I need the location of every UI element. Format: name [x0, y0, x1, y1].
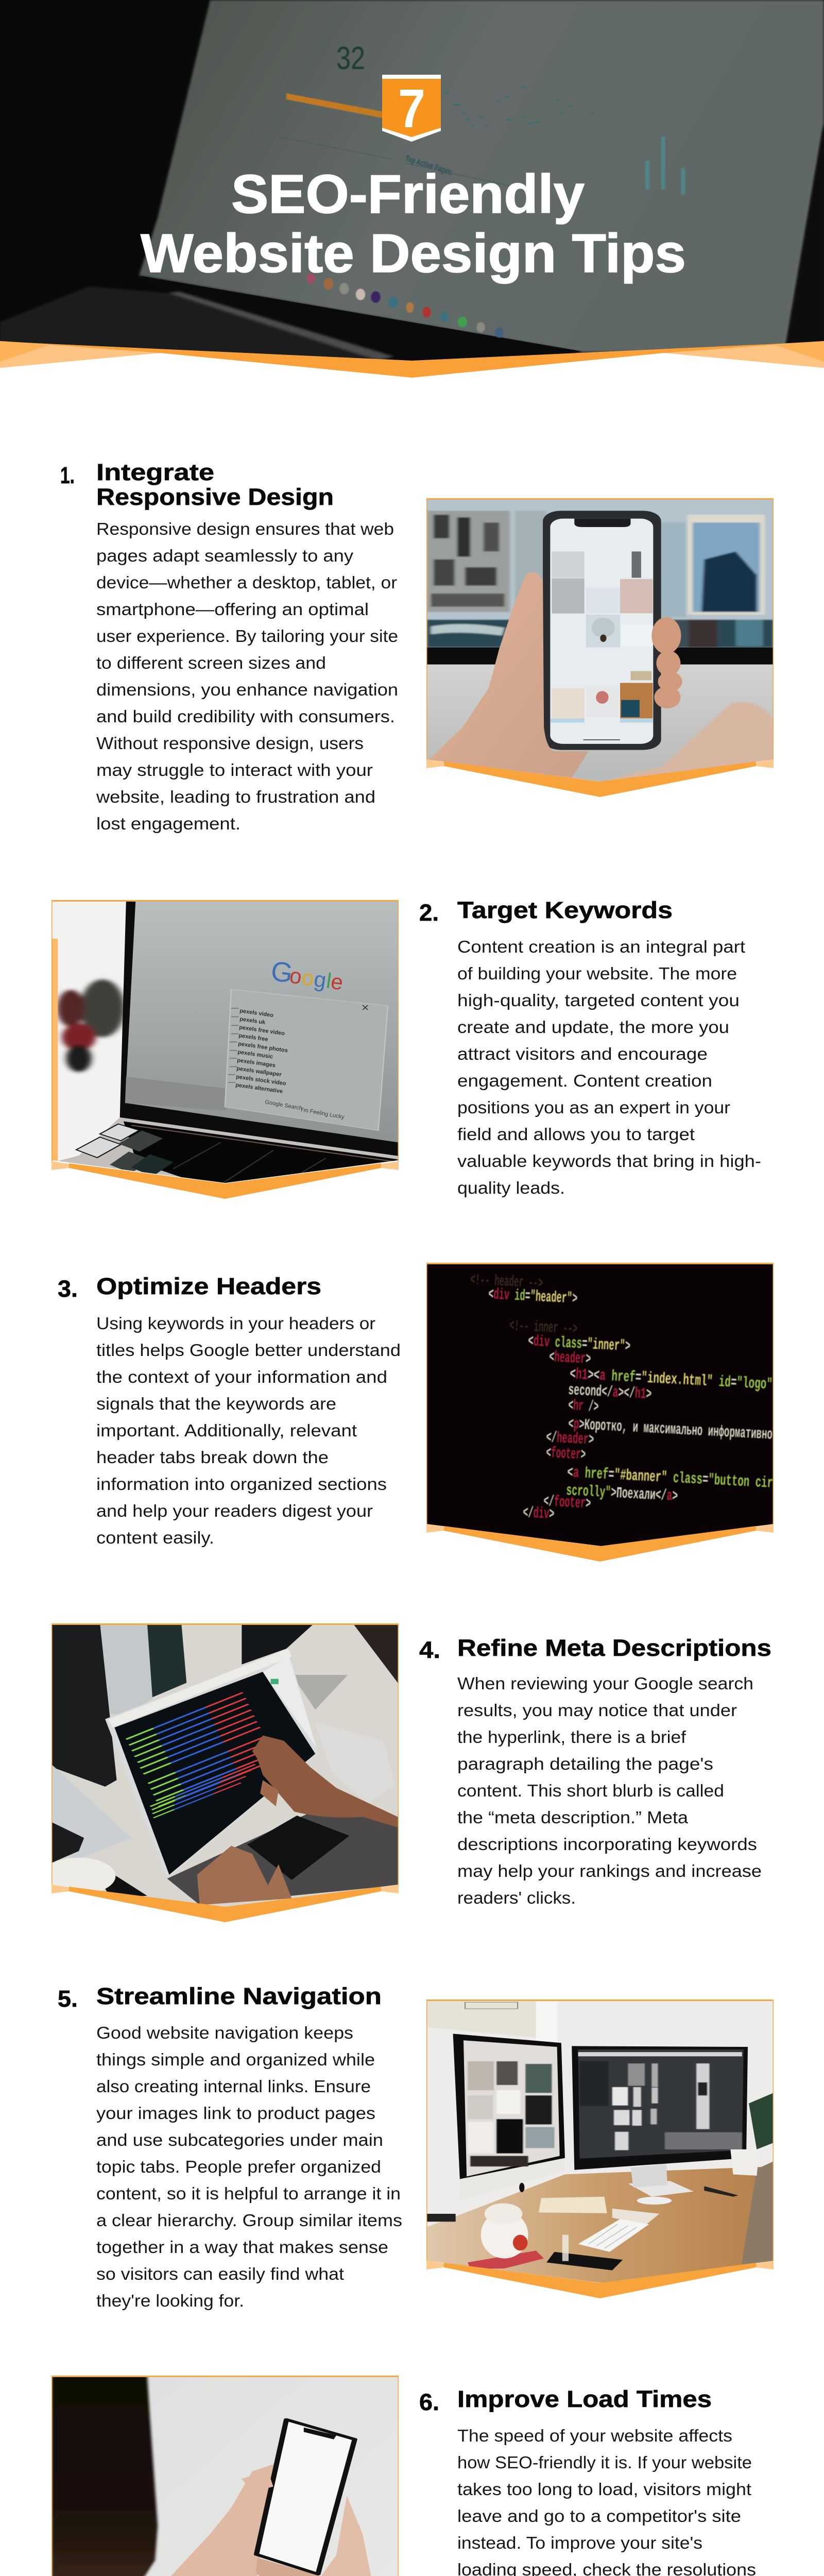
tip 5 ribbon — [426, 1999, 774, 2298]
tip 4 body text: When reviewing your Google search — [457, 1674, 753, 1693]
tip 6 photo: woman holding phone — [52, 2376, 398, 2576]
tip 3 body text: header tabs break down the — [96, 1448, 329, 1467]
tip 2: Target Keywords — [52, 897, 761, 1199]
badge: number 7: 7 — [398, 78, 425, 139]
tip 6 body text — [457, 2426, 756, 2576]
search suggestions: pexels images — [237, 1057, 276, 1069]
tip 5 body text: your images link to product pages — [96, 2104, 375, 2123]
tip 2 body text: positions you as an expert in your — [457, 1098, 730, 1117]
tip 6 body text: how SEO-friendly it is. If your website — [457, 2453, 752, 2472]
tip 1 body text: Without responsive design, users — [96, 734, 364, 753]
Google logo on screen: l — [325, 969, 333, 993]
tip 3 photo: HTML code on black screen: <a href="#banner" class="button cir — [566, 1464, 774, 1493]
tip 4 body text: descriptions incorporating keywords — [457, 1835, 757, 1854]
tip 5 body text: also creating internal links. Ensure — [96, 2077, 371, 2096]
tip 6 body text: instead. To improve your site's — [457, 2533, 702, 2552]
tip 5 number: 5. — [58, 1986, 78, 2012]
tip 5 body text: they're looking for. — [96, 2291, 244, 2310]
tip 6 ribbon — [52, 2376, 399, 2576]
tip 1 body text: Responsive design ensures that web — [96, 519, 394, 538]
Google logo on screen: e — [330, 969, 345, 995]
tip 5 body text: things simple and organized while — [96, 2050, 375, 2069]
tip 4 body text: the “meta description.” Meta — [457, 1808, 689, 1827]
tip 5 body text: a clear hierarchy. Group similar items — [96, 2211, 402, 2230]
tip 4 heading: Refine Meta Descriptions — [457, 1635, 771, 1661]
tip 5 body text: so visitors can easily find what — [96, 2264, 344, 2283]
tip 3 photo: HTML code on black screen: <div id="header"> — [488, 1286, 578, 1308]
tip 1 ribbon — [426, 498, 774, 797]
tip 3 photo: HTML code on black screen: </header> — [545, 1429, 594, 1449]
tip 1 body text: to different screen sizes and — [96, 653, 326, 672]
tip 3 body text: important. Additionally, relevant — [96, 1421, 357, 1440]
tip 6 body text: takes too long to load, visitors might — [457, 2480, 751, 2499]
tip 3 photo: HTML code on black screen: scrolly">Поехали</a> — [565, 1482, 678, 1505]
tip 5: Streamline Navigation — [58, 1983, 774, 2310]
tip 5 body text: together in a way that makes sense — [96, 2238, 388, 2257]
tip 2 body text: quality leads. — [457, 1178, 565, 1197]
tip 6 body text: leave and go to a competitor's site — [457, 2506, 741, 2526]
tip 3 body text: and help your readers digest your — [96, 1501, 373, 1520]
tip 2 body text — [457, 937, 761, 1197]
tip 6 heading: Improve Load Times — [457, 2386, 712, 2412]
tip 4 photo: person coding on laptop — [42, 1622, 398, 1911]
tip 1 body text: website, leading to frustration and — [96, 787, 375, 806]
dashboard reading: 32 — [336, 41, 365, 76]
search suggestions: pexels stock video — [236, 1074, 286, 1087]
tip 2 photo: laptop showing Google search — [52, 900, 398, 1192]
tip 3 body text: content easily. — [96, 1528, 214, 1547]
tip 3 body text — [96, 1314, 401, 1547]
search suggestions: pexels alternative — [235, 1082, 283, 1095]
tip 3 body text: the context of your information and — [96, 1367, 387, 1386]
tip 3: Optimize Headers — [58, 1263, 774, 1562]
Google logo on screen: o — [288, 963, 303, 989]
tip 2 body text: attract visitors and encourage — [457, 1044, 708, 1063]
tip 1 body text: pages adapt seamlessly to any — [96, 546, 354, 565]
title: SEO-Friendly — [231, 164, 585, 225]
Google logo on screen: G — [269, 955, 295, 989]
tip 4 ribbon — [52, 1623, 399, 1922]
tip 5 heading: Streamline Navigation — [96, 1983, 382, 2009]
tip 3 photo: HTML code on black screen: <div class="inner"> — [527, 1333, 631, 1355]
tip 3 photo: HTML code on black screen: <!-- header --> — [470, 1272, 543, 1293]
tip 1 heading: Integrate — [96, 459, 214, 485]
tip 2 body text: engagement. Content creation — [457, 1071, 712, 1090]
tip 5 body text: Good website navigation keeps — [96, 2023, 353, 2042]
search suggestions: pexels video — [239, 1008, 274, 1019]
tip 3 number: 3. — [58, 1276, 78, 1302]
tip 4 body text: content. This short blurb is called — [457, 1781, 724, 1800]
tip 1 heading: Responsive Design — [96, 484, 334, 510]
tip 3 photo: HTML code on black screen: <header> — [548, 1349, 591, 1368]
tip 6: Improve Load Times — [52, 2376, 756, 2576]
tip 4 number: 4. — [419, 1637, 440, 1663]
tip 2 body text: valuable keywords that bring in high- — [457, 1151, 761, 1171]
tip 2 heading: Target Keywords — [457, 897, 673, 923]
search suggestions: pexels free photos — [238, 1041, 288, 1054]
tip 3 photo: HTML code on black screen: <footer> — [545, 1445, 586, 1464]
tip 2 body text: of building your website. The more — [457, 964, 737, 983]
tip 1 body text: dimensions, you enhance navigation — [96, 680, 398, 699]
Google logo on screen: g — [313, 967, 328, 992]
tip 3 body text: information into organized sections — [96, 1475, 387, 1494]
search suggestions: pexels wallpaper — [236, 1065, 282, 1078]
tip 1 body text: smartphone—offering an optimal — [96, 600, 369, 619]
tip 3 ribbon — [426, 1263, 774, 1562]
tip 4 body text: results, you may notice that under — [457, 1701, 737, 1720]
tip 1 number: 1. — [60, 462, 75, 488]
badge: number 7 — [382, 75, 441, 142]
tip 1 body text: lost engagement. — [96, 814, 241, 833]
search suggestions — [235, 1008, 345, 1121]
search suggestions: Google Search — [264, 1099, 303, 1112]
tip 1: Integrate Responsive Design — [60, 459, 788, 833]
tip 4 body text — [457, 1674, 762, 1907]
tip 1 heading — [96, 459, 334, 510]
tip 4: Refine Meta Descriptions — [42, 1622, 771, 1922]
search suggestions: I'm Feeling Lucky — [300, 1107, 345, 1121]
search suggestions: pexels music — [237, 1049, 273, 1060]
hero photo: laptop analytics dashboard — [0, 0, 824, 361]
tip 5 body text: and use subcategories under main — [96, 2130, 383, 2149]
tip 5 photo: two monitors on a wooden desk — [427, 1999, 774, 2285]
tip 1 body text: device—whether a desktop, tablet, or — [96, 573, 397, 592]
title: Website Design Tips — [141, 223, 686, 284]
tip 3 photo: HTML code on black screen: </div> — [522, 1504, 555, 1523]
tip 3 photo: HTML code on black screen: </footer> — [543, 1493, 591, 1513]
Google logo on screen — [272, 962, 342, 991]
tip 5 body text: content, so it is helpful to arrange it in — [96, 2184, 401, 2203]
tip 3 body text: signals that the keywords are — [96, 1394, 336, 1413]
tip 3 photo: HTML code on black screen: <h1><a href="index.html" id="logo" — [569, 1366, 773, 1394]
hero ribbon: orange wave — [0, 341, 824, 378]
tip 3 photo: HTML code on black screen: second</a></h1> — [568, 1382, 652, 1403]
tip 5 body text: topic tabs. People prefer organized — [96, 2157, 381, 2176]
tip 1 body text: and build credibility with consumers. — [96, 707, 395, 726]
tip 3 photo: HTML code on black screen: <hr /> — [568, 1397, 599, 1416]
tip 2 body text: high-quality, targeted content you — [457, 991, 740, 1010]
tip 1 body text: user experience. By tailoring your site — [96, 626, 398, 646]
tip 2 number: 2. — [419, 900, 439, 926]
search suggestions: pexels free video — [239, 1024, 285, 1037]
tip 4 body text: readers' clicks. — [457, 1888, 576, 1907]
search suggestions: pexels free — [238, 1032, 268, 1043]
tip 4 body text: the hyperlink, there is a brief — [457, 1727, 686, 1747]
hero photo: laptop analytics dashboard: Top Active Pages: — [404, 154, 454, 177]
tip 6 body text: The speed of your website affects — [457, 2426, 732, 2445]
tip 3 heading: Optimize Headers — [96, 1273, 321, 1299]
tip 3 photo: HTML code on black screen — [426, 1263, 774, 1551]
tip 5 body text — [96, 2023, 402, 2310]
title — [141, 164, 686, 284]
tip 1 body text: may struggle to interact with your — [96, 760, 373, 779]
tip 4 body text: paragraph detailing the page's — [457, 1754, 713, 1773]
search suggestions: pexels uk — [239, 1016, 266, 1026]
tip 1 photo: hand holding smartphone — [420, 496, 788, 785]
Google logo on screen: o — [300, 965, 316, 991]
hero banner — [0, 0, 824, 378]
tip 3 photo: HTML code on black screen: <!-- inner --> — [509, 1317, 578, 1338]
tip 2 ribbon — [52, 900, 399, 1199]
tip 2 body text: create and update, the more you — [457, 1018, 729, 1037]
tip 6 number: 6. — [419, 2389, 439, 2415]
tip 3 body text: Using keywords in your headers or — [96, 1314, 375, 1333]
tip 2 body text: Content creation is an integral part — [457, 937, 745, 956]
tip 4 body text: may help your rankings and increase — [457, 1861, 762, 1880]
tip 1 body text — [96, 519, 398, 833]
tip 3 body text: titles helps Google better understand — [96, 1341, 401, 1360]
tip 2 body text: field and allows you to target — [457, 1125, 695, 1144]
